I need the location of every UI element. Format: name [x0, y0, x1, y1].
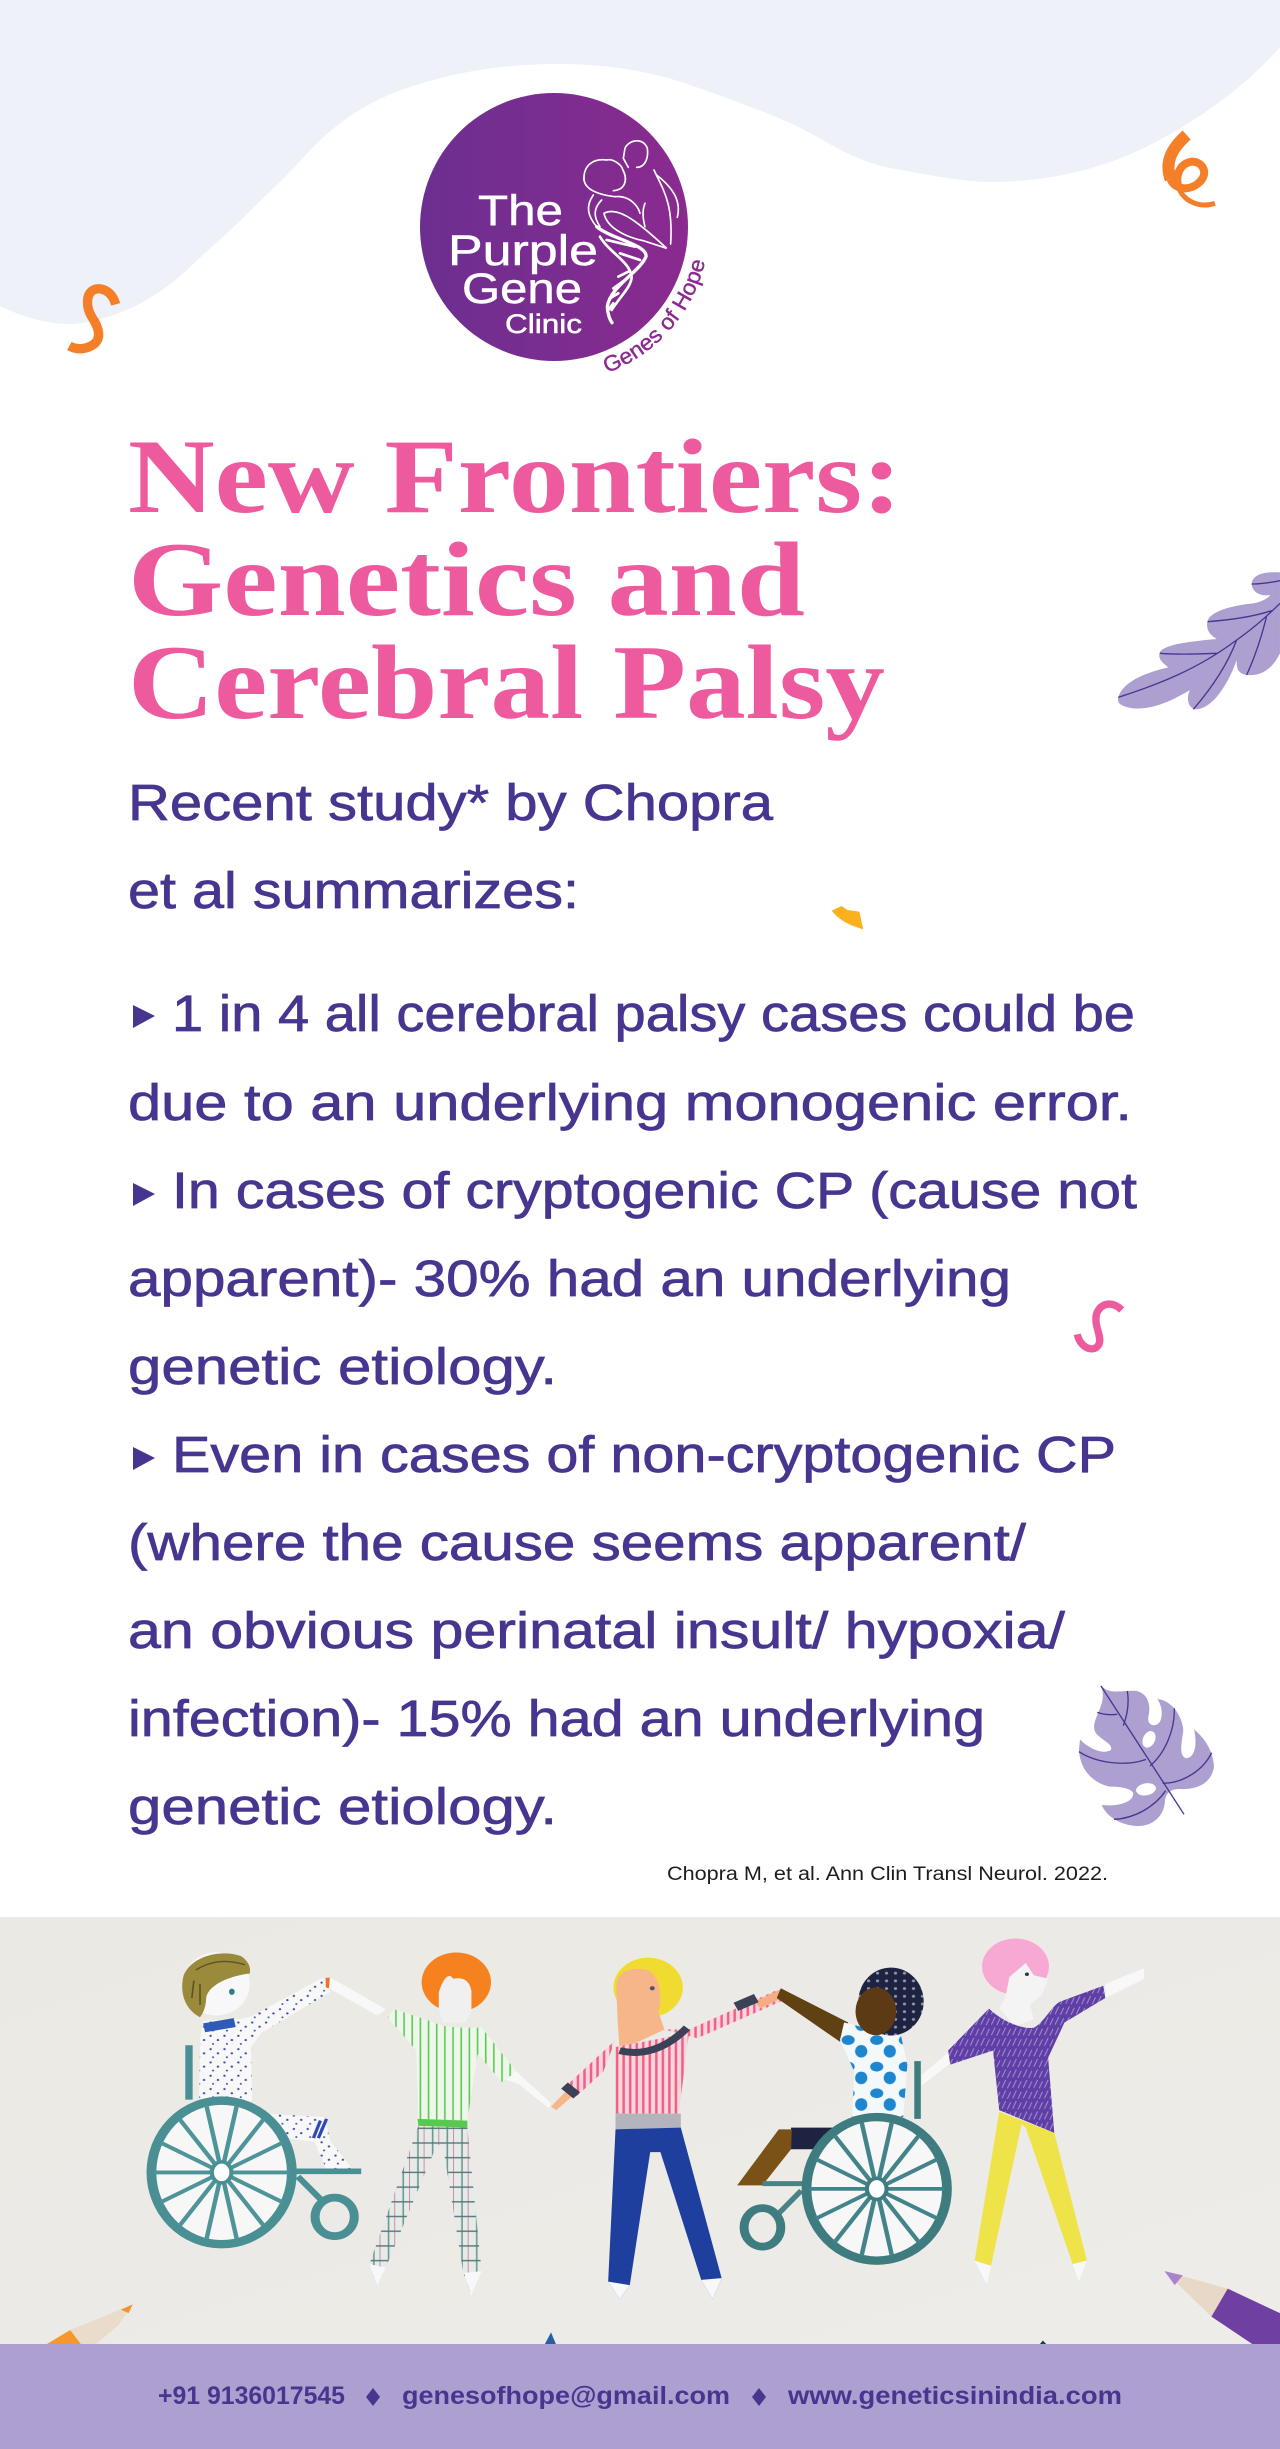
- person with orange hair, green shirt, plaid trousers: [326, 1953, 551, 2296]
- title: Genetics and: [128, 521, 805, 638]
- logo wordmark: Purple: [448, 227, 598, 275]
- person with yellow hair, pink shirt, blue trousers: [551, 1958, 781, 2299]
- title: New Frontiers:: [128, 418, 902, 535]
- bullet 2: genetic etiology.: [128, 1338, 557, 1395]
- bullet 3: (where the cause seems apparent/: [128, 1514, 1027, 1571]
- intro text: Recent study* by Chopra: [128, 774, 774, 831]
- person in wheelchair with dotted shirt: [151, 1953, 361, 2244]
- logo wordmark: Clinic: [505, 309, 582, 339]
- logo: The Purple Gene Clinic: [420, 93, 704, 371]
- icon: orange swirl right: [1168, 135, 1215, 205]
- photo: paper cut-out people holding hands: [0, 1917, 1280, 2344]
- blue pencil tip: [545, 2332, 556, 2344]
- bullet 2: [128, 1162, 1137, 1395]
- email: genesofhope@gmail.com: [402, 2382, 730, 2410]
- person with pink hair, purple top, yellow trousers: [922, 1939, 1144, 2284]
- intro text: et al summarizes:: [128, 862, 579, 919]
- bullet 3: Even in cases of non-cryptogenic CP: [172, 1426, 1116, 1483]
- icon: diamond separator: [366, 2388, 380, 2406]
- logo wordmark: The: [478, 187, 563, 235]
- icon: pink squiggle: [1077, 1304, 1122, 1349]
- title: [128, 418, 902, 741]
- footer contact bar: [0, 2344, 1280, 2449]
- bullet 3: genetic etiology.: [128, 1778, 557, 1835]
- logo tagline: Genes of Hope: [604, 260, 704, 371]
- bullet 3: an obvious perinatal insult/ hypoxia/: [128, 1602, 1066, 1659]
- citation: Chopra M, et al. Ann Clin Transl Neurol. 2022.: [667, 1864, 1108, 1885]
- right group: person with yellow hair, wheelchair user, person with pink hair: [551, 1939, 1280, 2344]
- logo illustration: mother, baby and DNA helix: [584, 141, 678, 323]
- bullet 3: [128, 1426, 1116, 1835]
- person in wheelchair with blue spotted shirt: [737, 1968, 947, 2261]
- icon: orange squiggle left: [69, 289, 116, 349]
- icon: yellow confetti: [832, 906, 863, 929]
- title: Cerebral Palsy: [128, 624, 885, 741]
- purple pencil: [1164, 2271, 1280, 2344]
- bullet 3: infection)- 15% had an underlying: [128, 1690, 985, 1747]
- icon: monstera leaf: [1079, 1686, 1214, 1826]
- bullet 1: due to an underlying monogenic error.: [128, 1074, 1132, 1131]
- website: www.geneticsinindia.com: [787, 2382, 1122, 2410]
- orange pencil: [47, 2304, 133, 2344]
- bullet list: [128, 985, 1137, 1835]
- dark pencil tip: [1040, 2340, 1046, 2344]
- logo wordmark: Gene: [462, 265, 582, 313]
- intro text: [128, 774, 774, 919]
- background wave shape: [0, 0, 1280, 324]
- bullet 2: In cases of cryptogenic CP (cause not: [172, 1162, 1137, 1219]
- bullet 1: [128, 985, 1135, 1131]
- left group: wheelchair user and person in green shirt: [47, 1953, 556, 2344]
- icon: lilac leaf top right: [1118, 572, 1280, 709]
- icon: diamond separator: [752, 2388, 766, 2406]
- logo wordmark: [448, 187, 598, 339]
- bullet 2: apparent)- 30% had an underlying: [128, 1250, 1011, 1307]
- bullet 1: 1 in 4 all cerebral palsy cases could be: [172, 985, 1135, 1042]
- phone: +91 9136017545: [158, 2382, 345, 2410]
